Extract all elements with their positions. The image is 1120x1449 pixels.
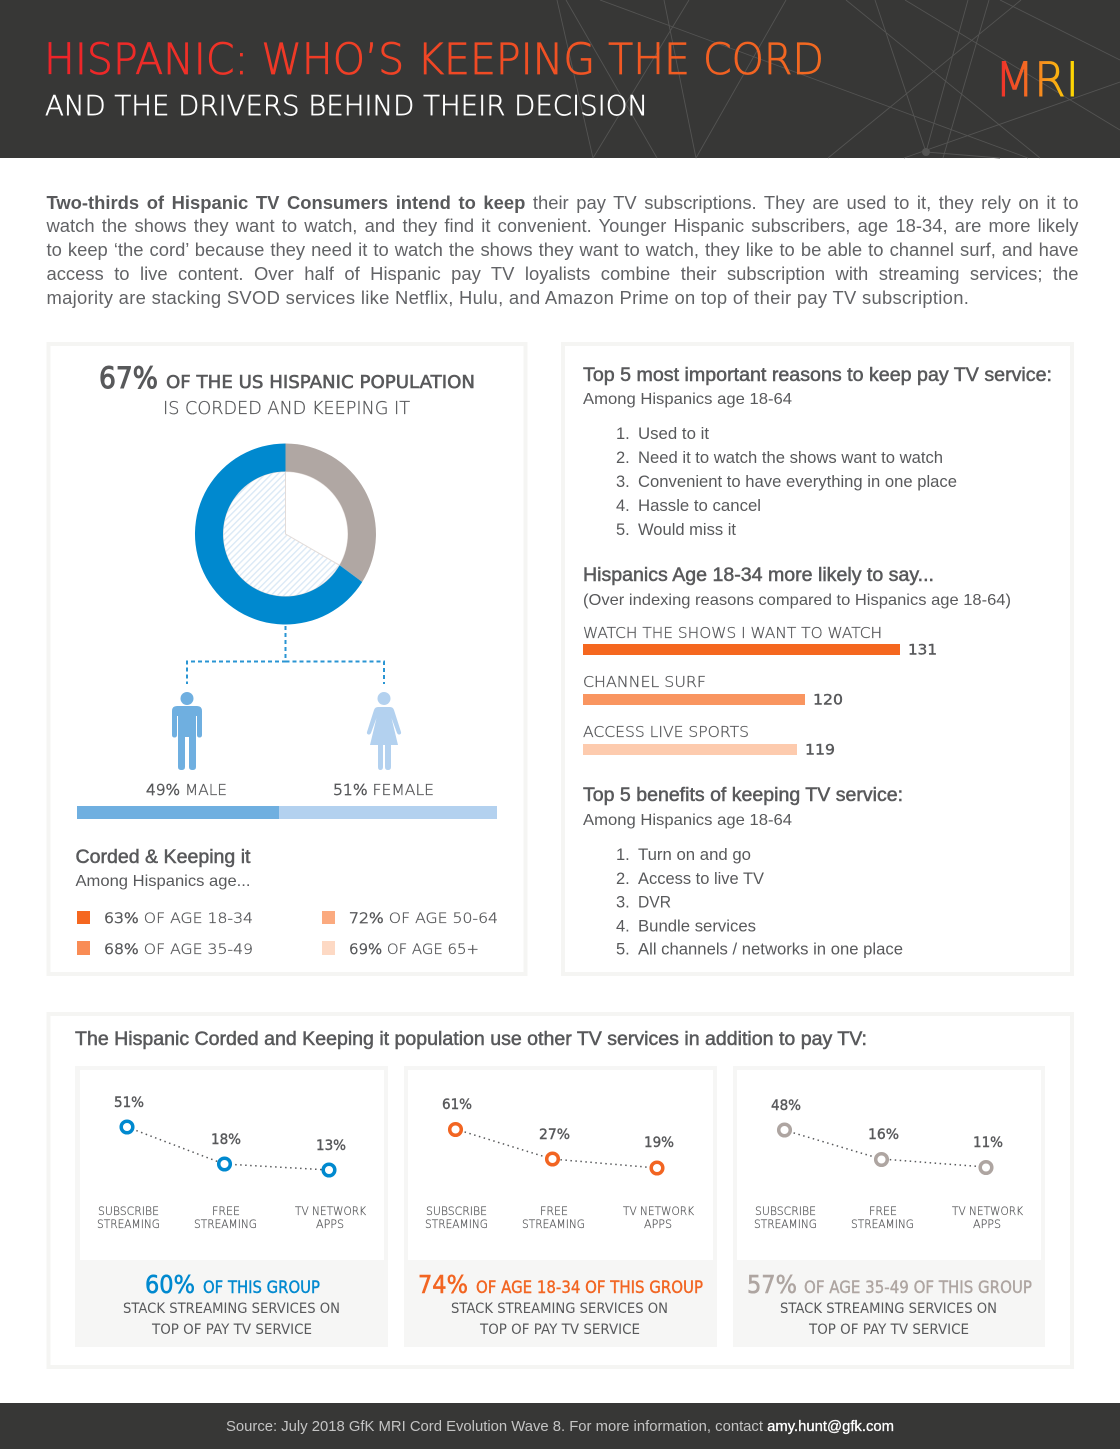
subheading: among hispanics age: Among Hispanics age...: [76, 873, 251, 890]
line chart: age 18-34 group: STREAMING: [522, 1217, 585, 1231]
line chart: age 35-49 group: 48%: [771, 1098, 801, 1114]
list: top 5 benefits: DVR: [638, 894, 671, 912]
callout: 74 percent: 74%: [418, 1270, 468, 1299]
list: top 5 reasons: Hassle to cancel: [638, 497, 761, 515]
callout: 60 percent: STACK STREAMING SERVICES ON: [123, 1301, 340, 1317]
line chart: all hispanic group: STREAMING: [194, 1217, 257, 1231]
list: top 5 benefits: 3.: [616, 894, 630, 912]
heading: top 5 benefits: Top 5 benefits of keeping TV service:: [583, 785, 903, 806]
line chart: all hispanic group: 13%: [316, 1138, 346, 1154]
label: female share: 51% FEMALE: [333, 781, 434, 799]
intro paragraph: access to live content. Over half of Hispanic pay TV loyalists combine their subscription with streaming services; the: [46, 263, 1078, 284]
line chart: all hispanic group: 51%: [114, 1095, 144, 1111]
subheading: benefits audience: Among Hispanics age 18-64: [583, 812, 792, 829]
callout: 74 percent: [418, 1270, 703, 1338]
age legend: 69% OF AGE 65+: [349, 942, 479, 958]
list: top 5 reasons: Convenient to have everything in one place: [638, 473, 957, 491]
headline: 67 percent: 67%: [99, 361, 158, 395]
card: age 18-34 group: [404, 1066, 717, 1347]
list: top 5 reasons: 5.: [616, 521, 630, 539]
line chart: all hispanic group: 18%: [211, 1132, 241, 1148]
line chart: age 18-34 group: STREAMING: [425, 1217, 488, 1231]
intro paragraph: to keep ‘the cord’ because they need it to watch the shows they want to watch, they like to be able to channel surf, and have: [46, 239, 1078, 260]
intro paragraph: majority are stacking SVOD services like Netflix, Hulu, and Amazon Prime on top of their pay TV subscription.: [46, 287, 969, 308]
label: male share: 49% MALE: [146, 781, 227, 799]
headline: 67 percent: OF THE US HISPANIC POPULATION: [166, 372, 475, 393]
line chart: age 35-49 group: APPS: [973, 1217, 1001, 1231]
line chart: age 35-49 group: STREAMING: [851, 1217, 914, 1231]
callout: 57 percent: STACK STREAMING SERVICES ON: [780, 1301, 997, 1317]
callout: 57 percent: OF AGE 35-49 OF THIS GROUP: [804, 1278, 1032, 1297]
line chart: all hispanic group: STREAMING: [97, 1217, 160, 1231]
subheading: reasons audience: Among Hispanics age 18-64: [583, 391, 792, 408]
age legend: 68% OF AGE 35-49: [104, 942, 253, 958]
heading: top 5 reasons: Top 5 most important reasons to keep pay TV service:: [583, 365, 1052, 386]
dashed connector: [187, 626, 384, 684]
list: top 5 benefits: Bundle services: [638, 918, 756, 936]
icon: female: [367, 692, 401, 770]
line chart: age 18-34 group: TV NETWORK: [623, 1204, 694, 1218]
panel: other TV services: [48, 1014, 1072, 1367]
callout: 57 percent: [747, 1270, 1032, 1338]
title: HISPANIC: WHO’S KEEPING THE CORD: [44, 35, 824, 85]
panel: reasons and benefits: [563, 344, 1072, 974]
line chart: age 35-49 group: TV NETWORK: [952, 1204, 1023, 1218]
line chart: age 18-34 group: [425, 1097, 694, 1231]
line chart: age 18-34 group: 27%: [539, 1127, 570, 1143]
list: top 5 reasons: Need it to watch the shows want to watch: [638, 449, 943, 467]
list: top 5 reasons: 3.: [616, 473, 630, 491]
line chart: all hispanic group: [97, 1095, 366, 1231]
bar chart: over indexing reasons: WATCH THE SHOWS I WANT TO WATCH: [583, 624, 882, 642]
list: top 5 reasons: 2.: [616, 449, 630, 467]
list: top 5 benefits: 5.: [616, 940, 630, 958]
callout: 60 percent: [123, 1270, 340, 1338]
bar chart: over indexing reasons: 131: [908, 642, 937, 658]
age legend: 63% OF AGE 18-34: [104, 911, 253, 927]
list: top 5 reasons: 4.: [616, 497, 630, 515]
list: top 5 benefits: 1.: [616, 846, 630, 864]
callout: 57 percent: TOP OF PAY TV SERVICE: [808, 1322, 969, 1338]
list: top 5 benefits: Access to live TV: [638, 870, 764, 888]
logo: MRI: MRI: [995, 53, 1079, 108]
line chart: age 18-34 group: SUBSCRIBE: [426, 1204, 487, 1218]
line chart: all hispanic group: APPS: [316, 1217, 344, 1231]
heading: other TV services: The Hispanic Corded and Keeping it population use other TV services in addition to pay TV:: [75, 1029, 867, 1050]
age legend: [77, 911, 498, 958]
line chart: age 35-49 group: [754, 1098, 1023, 1231]
panel: corded and keeping it: [48, 344, 526, 974]
icon: male: [172, 692, 202, 770]
callout: 60 percent: 60%: [145, 1270, 195, 1299]
list: top 5 benefits: 2.: [616, 870, 630, 888]
line chart: age 35-49 group: 16%: [868, 1127, 899, 1143]
bar chart: over indexing reasons: CHANNEL SURF: [583, 673, 706, 691]
list: top 5 reasons: Would miss it: [638, 521, 736, 539]
line chart: age 35-49 group: STREAMING: [754, 1217, 817, 1231]
headline: 67 percent: [99, 361, 475, 419]
bar chart: over indexing reasons: [583, 624, 937, 758]
line chart: age 35-49 group: FREE: [869, 1204, 897, 1218]
list: top 5 benefits: 4.: [616, 918, 630, 936]
age legend: 72% OF AGE 50-64: [349, 911, 498, 927]
list: top 5 reasons: 1.: [616, 425, 630, 443]
headline: 67 percent: IS CORDED AND KEEPING IT: [163, 398, 410, 419]
subtitle: AND THE DRIVERS BEHIND THEIR DECISION: [45, 89, 648, 122]
heading: age 18-34: Hispanics Age 18-34 more likely to say...: [583, 565, 934, 586]
line chart: age 18-34 group: APPS: [644, 1217, 672, 1231]
footer: Source: July 2018 GfK MRI Cord Evolution Wave 8. For more information, contact amy.hunt@gfk.com: [226, 1418, 894, 1435]
callout: 74 percent: OF AGE 18-34 OF THIS GROUP: [476, 1278, 703, 1297]
callout: 74 percent: STACK STREAMING SERVICES ON: [451, 1301, 668, 1317]
line chart: age 18-34 group: 19%: [644, 1135, 674, 1151]
header band: [0, 0, 1120, 158]
intro paragraph: [46, 192, 1078, 308]
line chart: all hispanic group: SUBSCRIBE: [98, 1204, 159, 1218]
callout: 74 percent: TOP OF PAY TV SERVICE: [479, 1322, 640, 1338]
donut chart: [195, 443, 376, 625]
bar chart: over indexing reasons: 119: [805, 742, 835, 758]
callout: 57 percent: 57%: [747, 1270, 797, 1299]
heading: corded and keeping it: Corded & Keeping it: [76, 847, 251, 868]
line chart: all hispanic group: FREE: [212, 1204, 240, 1218]
line chart: age 35-49 group: SUBSCRIBE: [755, 1204, 816, 1218]
intro paragraph: Two-thirds of Hispanic TV Consumers intend to keep their pay TV subscriptions. They are used to it, they rely on it to: [46, 192, 1078, 212]
line chart: age 18-34 group: 61%: [442, 1097, 472, 1113]
bar chart: over indexing reasons: 120: [813, 692, 843, 708]
list: top 5 benefits: Turn on and go: [638, 846, 751, 864]
line chart: age 35-49 group: 11%: [973, 1135, 1003, 1151]
card: all hispanic group: [75, 1066, 388, 1347]
gender split bar: [77, 806, 497, 819]
line chart: age 18-34 group: FREE: [540, 1204, 568, 1218]
list: top 5 benefits: All channels / networks in one place: [638, 940, 903, 958]
callout: 60 percent: TOP OF PAY TV SERVICE: [151, 1322, 312, 1338]
callout: 60 percent: OF THIS GROUP: [203, 1278, 320, 1297]
line chart: all hispanic group: TV NETWORK: [295, 1204, 366, 1218]
card: age 35-49 group: [733, 1066, 1045, 1347]
list: top 5 reasons: Used to it: [638, 425, 709, 443]
subheading: over indexing: (Over indexing reasons compared to Hispanics age 18-64): [583, 592, 1011, 609]
footer: [0, 1403, 1120, 1449]
bar chart: over indexing reasons: ACCESS LIVE SPORTS: [583, 723, 749, 741]
list: top 5 reasons: [616, 425, 957, 539]
list: top 5 benefits: [616, 846, 903, 958]
intro paragraph: watch the shows they want to watch, and they find it convenient. Younger Hispanic subscribers, age 18-34, are more likely: [46, 215, 1078, 236]
